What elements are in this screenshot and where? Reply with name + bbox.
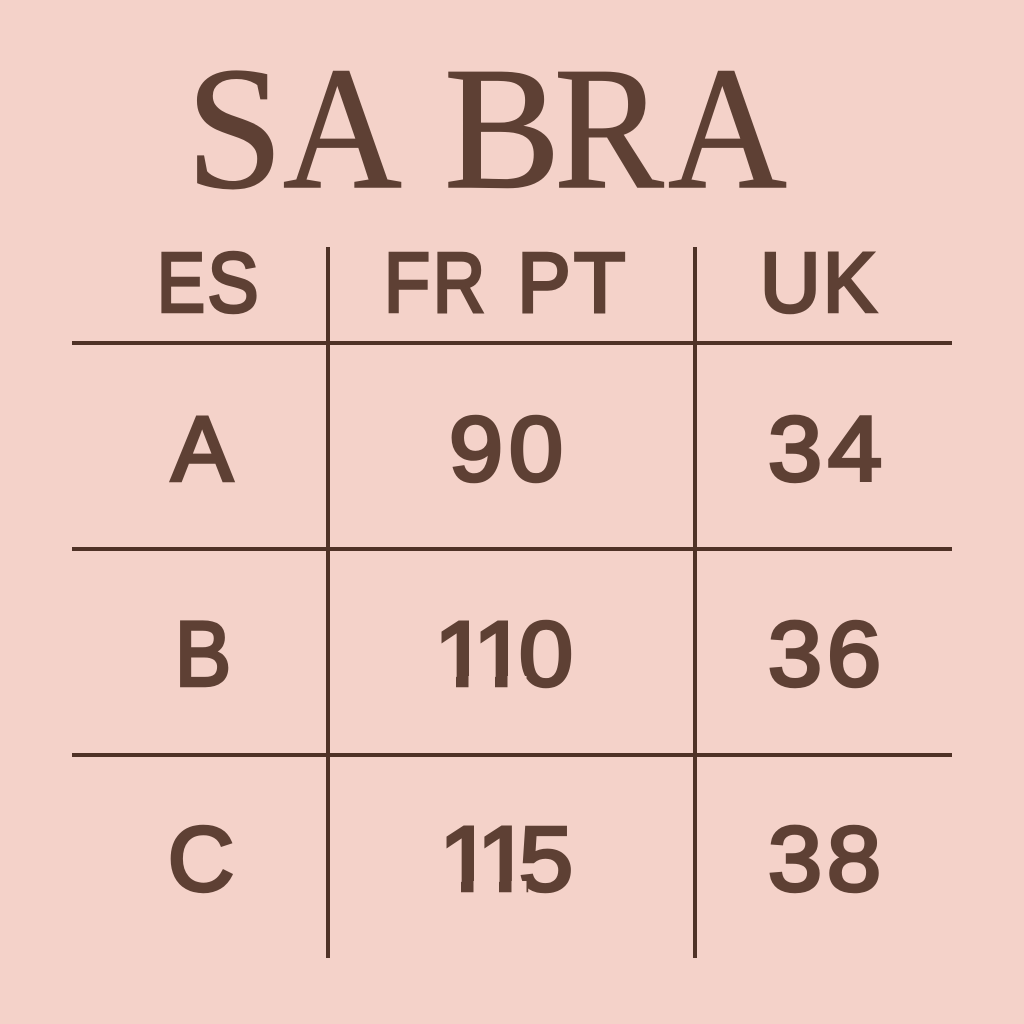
row B xyxy=(175,603,881,706)
header row: S xyxy=(208,236,258,330)
title: S xyxy=(186,31,283,225)
header row: F xyxy=(384,236,430,330)
header row: E xyxy=(157,236,205,330)
row A: 90 xyxy=(449,398,563,501)
grid lines xyxy=(72,247,952,958)
row B: 110 xyxy=(434,603,573,706)
row B: B xyxy=(175,604,231,706)
table xyxy=(72,236,952,958)
row C: 38 xyxy=(768,808,881,911)
header row xyxy=(157,236,876,330)
row A xyxy=(171,398,882,501)
header row: R xyxy=(433,236,485,330)
row A: 34 xyxy=(768,398,882,501)
title: R xyxy=(554,31,664,225)
header row: U xyxy=(760,236,820,330)
header row: T xyxy=(574,236,625,330)
title: B xyxy=(430,31,561,225)
title: A xyxy=(283,31,402,225)
header row: K xyxy=(823,236,876,330)
row B: 36 xyxy=(768,603,881,706)
row C xyxy=(168,808,881,911)
row C: C xyxy=(168,808,234,910)
header row: P xyxy=(518,236,570,330)
row C: 115 xyxy=(439,808,573,911)
title: A xyxy=(668,31,787,225)
row A: A xyxy=(171,398,233,500)
